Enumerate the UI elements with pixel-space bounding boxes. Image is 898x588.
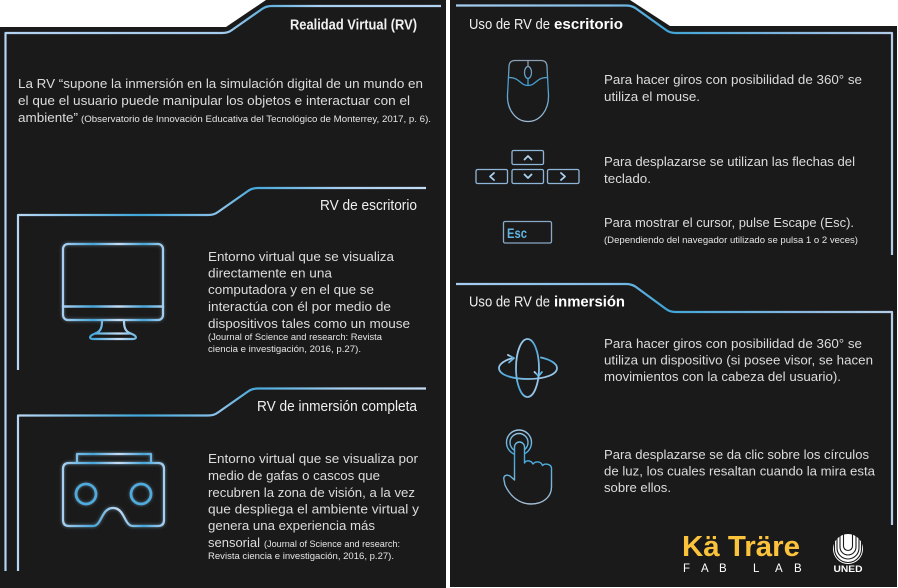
logo: Ka Trare Fab Lab: FAB LAB bbox=[683, 563, 802, 575]
text block: escape bbox=[604, 215, 858, 246]
heading: uso de RV de escritorio bbox=[469, 16, 623, 33]
panel: left background bbox=[0, 0, 446, 588]
text block: giros mouse bbox=[604, 72, 862, 104]
text block: definicion RV: ambiente” bbox=[18, 110, 78, 125]
text block: descripcion inmersion: Entorno virtual que se visualiza por bbox=[208, 451, 419, 466]
frame: RV de escritorio bbox=[18, 188, 426, 370]
text block: descripcion inmersion: sensorial bbox=[208, 535, 260, 550]
text block: flechas bbox=[604, 154, 855, 186]
heading: uso de RV de inmersion bbox=[469, 294, 625, 310]
text block: descripcion escritorio: ciencia e investigación, 2016, p.27). bbox=[208, 344, 361, 355]
text block: descripcion escritorio: dispositivos tales como un mouse bbox=[208, 316, 410, 331]
text block: descripcion inmersion bbox=[208, 451, 420, 562]
logo: UNED bbox=[833, 534, 863, 575]
text block: definicion RV: (Observatorio de Innovación Educativa del Tecnológico de Monterrey, 2017, p. 6). bbox=[81, 114, 431, 125]
text block: giros dispositivo: utiliza un dispositivo (si posee visor, se hacen bbox=[604, 352, 873, 368]
text block: definicion RV bbox=[18, 76, 431, 125]
text block: descripcion inmersion: medio de gafas o cascos que bbox=[208, 468, 380, 483]
icon: mouse bbox=[507, 60, 549, 122]
text block: flechas: Para desplazarse se utilizan las flechas del bbox=[604, 154, 855, 169]
text block: giros mouse: utiliza el mouse. bbox=[604, 89, 700, 104]
text block: circulos de luz bbox=[604, 447, 876, 495]
outer frame left bbox=[6, 6, 441, 571]
text block: escape: Para mostrar el cursor, pulse Escape (Esc). bbox=[604, 215, 854, 230]
frame: uso de escritorio bbox=[456, 6, 892, 255]
icon: monitor bbox=[63, 244, 163, 339]
icon: gafas VR bbox=[63, 454, 164, 526]
text block: descripcion escritorio: (Journal of Science and research: Revista bbox=[208, 332, 383, 343]
icon: rotacion 360 bbox=[499, 339, 557, 397]
text block: descripcion escritorio: interactúa con él por medio de bbox=[208, 299, 391, 314]
icon: mano con clic bbox=[504, 430, 552, 504]
text block: descripcion inmersion: que despliega el ambiente virtual y bbox=[208, 502, 420, 516]
text block: giros dispositivo bbox=[604, 336, 873, 384]
text block: flechas: teclado. bbox=[604, 171, 651, 186]
text block: giros dispositivo: movimientos con la cabeza del usuario). bbox=[604, 369, 841, 384]
text block: circulos de luz: sobre ellos. bbox=[604, 480, 671, 495]
text block: descripcion escritorio: directamente en una bbox=[208, 266, 333, 280]
text block: descripcion inmersion: Revista ciencia e investigación, 2016, p.27). bbox=[208, 551, 394, 562]
panel: right background bbox=[450, 0, 897, 587]
heading: RV de escritorio: RV de escritorio bbox=[320, 197, 417, 214]
text block: descripcion inmersion: (Journal of Science and research: bbox=[264, 539, 400, 550]
icon: tecla Esc: Esc bbox=[507, 225, 527, 241]
text block: circulos de luz: de luz, los cuales resaltan cuando la mira esta bbox=[604, 464, 876, 478]
icon: tecla Esc bbox=[504, 222, 552, 243]
text block: circulos de luz: Para desplazarse se da clic sobre los círculos bbox=[604, 447, 870, 462]
icon: flechas del teclado bbox=[476, 150, 579, 184]
logo: Ka Trare Fab Lab: Kä Träre bbox=[682, 531, 800, 563]
frame: uso de inmersion bbox=[456, 284, 892, 525]
text block: definicion RV: el que el usuario puede manipular los objetos e interactuar con el bbox=[18, 93, 410, 108]
heading: RV de inmersion completa: RV de inmersión completa bbox=[257, 398, 418, 415]
heading: Realidad Virtual: Realidad Virtual (RV) bbox=[290, 16, 417, 34]
text block: giros mouse: Para hacer giros con posibilidad de 360° se bbox=[604, 72, 862, 87]
heading: uso de RV de escritorio: Uso de RV de bbox=[469, 16, 550, 33]
logo: UNED: UNED bbox=[834, 564, 863, 575]
text block: descripcion inmersion: recubren la zona de visión, a la vez bbox=[208, 485, 415, 500]
text block: giros dispositivo: Para hacer giros con posibilidad de 360° se bbox=[604, 336, 862, 351]
heading: uso de RV de escritorio: escritorio bbox=[554, 16, 623, 33]
text block: descripcion escritorio bbox=[208, 249, 410, 355]
text block: descripcion escritorio: Entorno virtual que se visualiza bbox=[208, 249, 395, 264]
text block: escape: (Dependiendo del navegador utilizado se pulsa 1 o 2 veces) bbox=[604, 235, 858, 246]
frame: RV de inmersion completa bbox=[18, 388, 426, 571]
heading: uso de RV de inmersion: Uso de RV de bbox=[469, 294, 550, 310]
text block: definicion RV: La RV “supone la inmersión en la simulación digital de un mundo en bbox=[18, 76, 423, 91]
heading: uso de RV de inmersion: inmersión bbox=[554, 294, 625, 310]
text block: descripcion inmersion: genera una experiencia más bbox=[208, 518, 375, 533]
text block: descripcion escritorio: computadora y en el que se bbox=[208, 282, 374, 297]
